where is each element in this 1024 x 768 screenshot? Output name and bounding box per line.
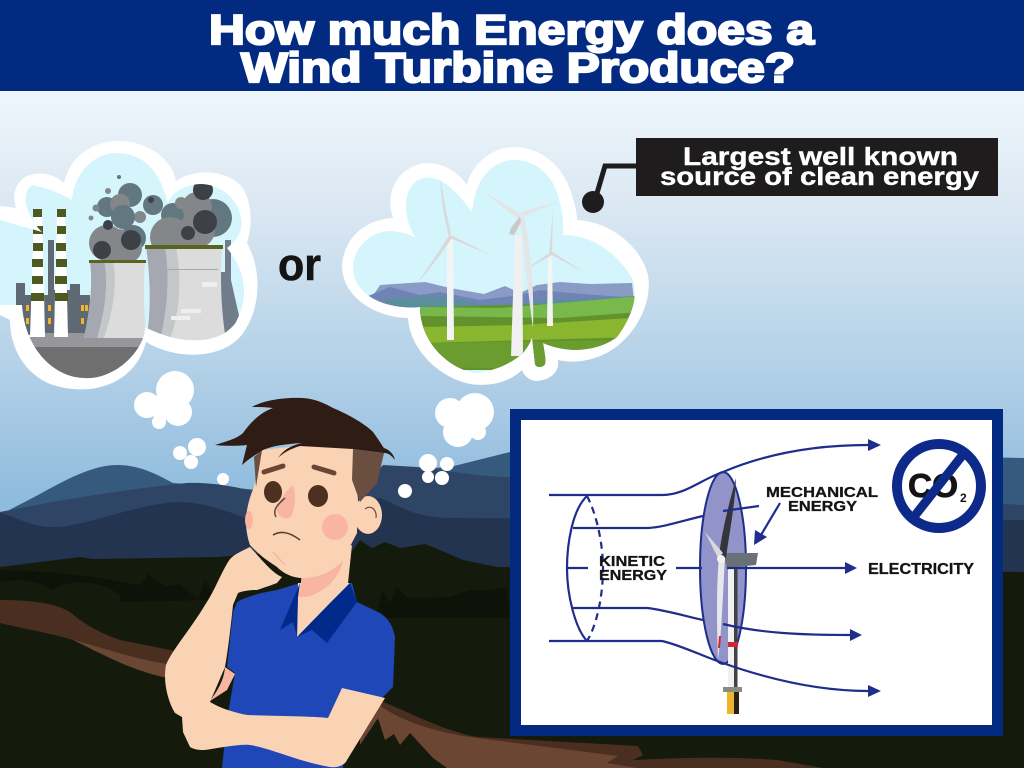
hair xyxy=(215,398,395,465)
mechanical energy label: ENERGY xyxy=(788,498,857,515)
thought cloud: wind turbines xyxy=(340,147,650,385)
left collar xyxy=(280,583,300,637)
swept area disc xyxy=(700,472,746,664)
kinetic energy label xyxy=(599,553,667,584)
no CO2 icon: CO xyxy=(908,467,958,504)
nose xyxy=(277,485,295,518)
left sideburn xyxy=(254,450,262,487)
title line 1: How much Energy does a xyxy=(209,6,815,53)
thought bubbles right xyxy=(398,393,494,498)
right collar xyxy=(297,583,357,643)
small turbine right xyxy=(520,208,585,326)
sky background xyxy=(0,91,1024,591)
word: or: or xyxy=(278,239,321,290)
left eyebrow xyxy=(264,466,283,472)
right eye xyxy=(308,485,328,507)
smoke tower one xyxy=(88,175,163,263)
main turbine xyxy=(480,189,562,356)
no CO2 icon xyxy=(897,444,981,528)
dirt path left xyxy=(0,600,180,680)
back mountains xyxy=(0,452,1024,560)
sideburn xyxy=(352,449,384,502)
cloud outline xyxy=(0,141,257,389)
callout box xyxy=(636,138,998,196)
mechanical energy arrow xyxy=(754,503,780,545)
title line 2: Wind Turbine Produce? xyxy=(241,44,795,91)
dirt path right xyxy=(360,703,637,768)
tree line xyxy=(0,570,216,602)
kinetic energy label: ENERGY xyxy=(599,567,667,584)
turbine blades xyxy=(705,478,736,660)
right tree line xyxy=(375,587,510,618)
landscape background xyxy=(0,452,1024,768)
yellow-green band xyxy=(420,318,640,343)
leader line xyxy=(595,166,640,200)
front mountains xyxy=(0,498,1024,580)
small turbine left xyxy=(417,178,495,340)
neck xyxy=(297,545,352,633)
flow line upper xyxy=(573,506,759,528)
mouth xyxy=(273,532,300,540)
elbow shadow xyxy=(210,667,235,701)
smoke tower two xyxy=(150,184,232,245)
panel frame xyxy=(516,414,998,730)
intake ellipse front xyxy=(567,496,587,641)
light grass strip xyxy=(420,296,640,318)
right cheek xyxy=(322,514,348,540)
shirt xyxy=(222,583,395,768)
thought cloud: power plant xyxy=(0,141,260,397)
left cheek xyxy=(245,511,253,529)
chin fold xyxy=(273,552,285,565)
flow arrow lower xyxy=(850,629,862,641)
grass base xyxy=(420,296,640,370)
nose line xyxy=(275,498,285,517)
left eye xyxy=(264,481,282,503)
ear xyxy=(354,496,382,534)
distant mountains xyxy=(372,282,634,315)
callout: clean energy xyxy=(582,138,998,213)
electricity label: ELECTRICITY xyxy=(868,561,974,578)
title bar xyxy=(0,0,1024,91)
flow line center xyxy=(568,567,845,569)
power plant scene xyxy=(0,153,244,378)
flow line bottom xyxy=(549,641,868,691)
shirt opening xyxy=(297,583,350,637)
panel: turbine energy diagram xyxy=(516,414,998,730)
ground xyxy=(34,347,138,378)
dark ground xyxy=(0,540,1024,768)
neck shadow xyxy=(298,560,343,597)
intake ellipse back xyxy=(587,496,603,641)
wind farm scene xyxy=(353,160,635,372)
mechanical energy label: MECHANICAL xyxy=(766,484,878,501)
turbine nacelle xyxy=(723,553,758,568)
leader dot xyxy=(582,191,604,213)
factory blocks xyxy=(16,240,90,335)
chimney right xyxy=(54,209,68,337)
factory right stacks xyxy=(221,240,239,334)
cloud outline xyxy=(342,147,649,385)
factory windows xyxy=(26,305,88,324)
grey yard xyxy=(30,333,150,348)
callout line 2: source of clean energy xyxy=(660,163,979,191)
right eyebrow xyxy=(314,467,334,473)
middle mountains xyxy=(0,465,1024,570)
flow line lower xyxy=(573,608,850,635)
teal foothills xyxy=(380,296,634,315)
foreground grass xyxy=(430,340,612,368)
dirt path left highlight xyxy=(73,640,180,680)
chimney left xyxy=(30,209,45,337)
flow arrow bottom xyxy=(868,685,881,697)
mechanical energy label xyxy=(766,484,878,515)
no CO2 icon: 2 xyxy=(960,491,967,505)
flow line top xyxy=(549,445,868,495)
dirt path right shadow xyxy=(378,700,823,768)
flow arrow center xyxy=(845,562,857,574)
face xyxy=(246,446,358,578)
callout line 1: Largest well known xyxy=(683,143,958,171)
arms xyxy=(165,547,385,767)
cooling tower one xyxy=(84,260,147,338)
kinetic energy label: KINETIC xyxy=(599,553,665,570)
near mountains xyxy=(368,287,634,315)
thought bubbles left xyxy=(134,371,229,485)
thinking man xyxy=(165,398,395,768)
turbine tower xyxy=(723,568,742,714)
cooling tower two xyxy=(145,245,226,340)
flow arrow top xyxy=(868,439,881,451)
